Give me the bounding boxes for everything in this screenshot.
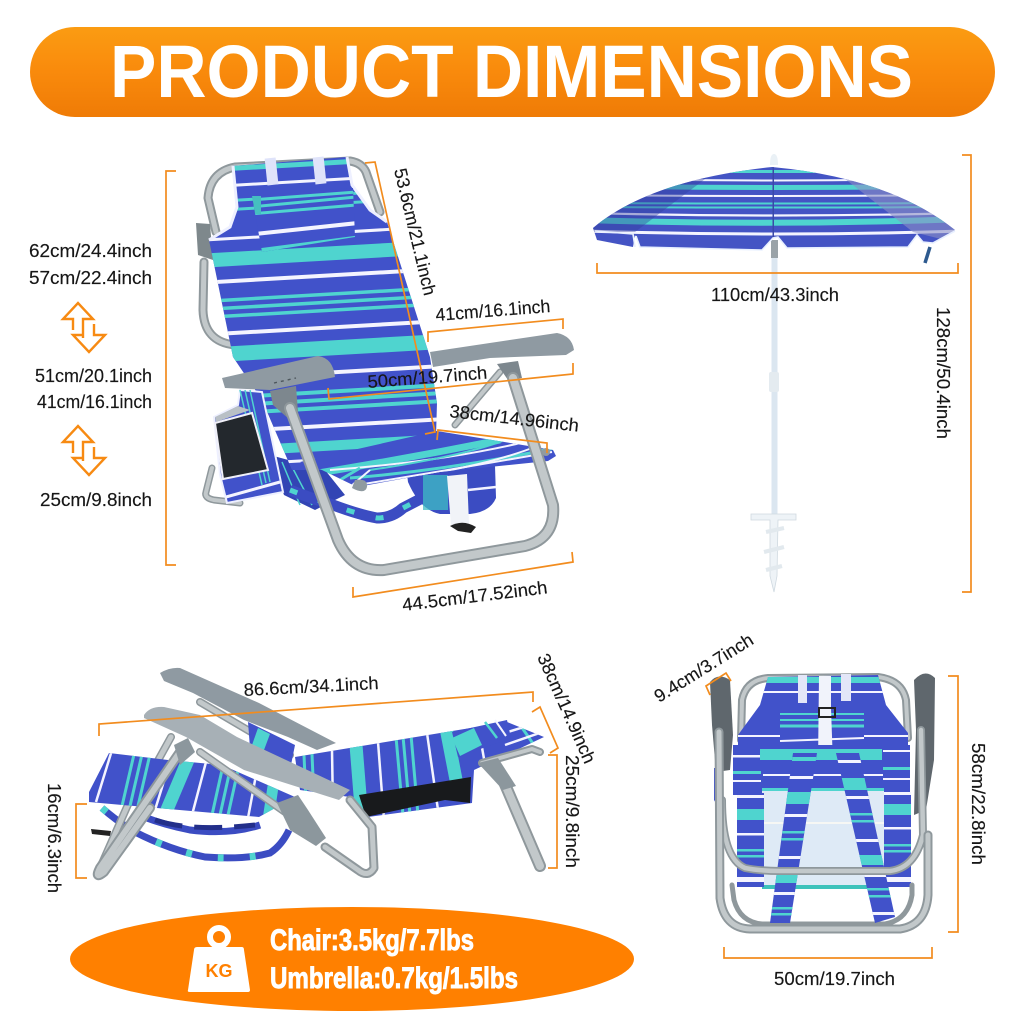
label: armrest length bbox=[428, 296, 563, 342]
label: umbrella height: 128cm/50.4inch bbox=[933, 307, 953, 439]
straps bbox=[91, 808, 289, 858]
weight text: Chair:3.5kg/7.7lbs bbox=[270, 924, 474, 957]
folding frame tubes bbox=[719, 730, 928, 929]
back top tube bbox=[741, 677, 908, 740]
label: chair base width bbox=[353, 552, 573, 615]
height options labels: 41cm/16.1inch bbox=[37, 392, 152, 412]
label: front seat height bbox=[44, 783, 87, 893]
main chair photo bbox=[172, 150, 574, 570]
height options labels: 25cm/9.8inch bbox=[40, 490, 152, 510]
back fabric bbox=[209, 157, 437, 470]
label: chair inner width bbox=[328, 363, 573, 399]
fold fabric peek bbox=[248, 722, 295, 770]
weight callout bbox=[70, 907, 634, 1011]
label: front seat height: 16cm/6.3inch bbox=[44, 783, 64, 893]
label: folded width bbox=[724, 947, 932, 989]
label: headrest length: 38cm/14.9inch bbox=[533, 650, 600, 766]
under-seat straps bbox=[270, 455, 496, 533]
canopy hem bbox=[595, 231, 955, 250]
headrest piping and straps bbox=[209, 156, 387, 240]
reclined chair photo bbox=[85, 668, 550, 875]
inner lower tube bbox=[732, 885, 912, 924]
side fabric left bbox=[737, 793, 764, 887]
label: umbrella width bbox=[597, 263, 958, 305]
label: chair base width: 44.5cm/17.52inch bbox=[401, 577, 548, 615]
weight text: Umbrella:0.7kg/1.5lbs bbox=[270, 962, 518, 995]
label: back height: 53.6cm/21.1inch bbox=[390, 166, 440, 297]
weight text bbox=[270, 924, 518, 995]
title banner: PRODUCT DIMENSIONS bbox=[110, 30, 913, 113]
label: reclined length: 86.6cm/34.1inch bbox=[243, 673, 379, 700]
height bracket left bbox=[166, 171, 176, 565]
canopy bbox=[593, 167, 955, 250]
label: back leg height: 25cm/9.8inch bbox=[562, 755, 582, 868]
label: back height bbox=[365, 162, 440, 434]
label: back leg height bbox=[548, 755, 582, 868]
label: reclined length bbox=[99, 673, 533, 736]
label: chair inner width: 50cm/19.7inch bbox=[367, 363, 488, 392]
foot fabric bbox=[89, 753, 294, 817]
hinge plates bbox=[174, 738, 516, 846]
armrest right bbox=[430, 333, 574, 380]
height options labels bbox=[29, 241, 152, 510]
armrests bbox=[710, 673, 935, 815]
rear legs bbox=[206, 372, 500, 503]
label: seat depth: 38cm/14.96inch bbox=[449, 401, 580, 436]
armrest left bbox=[222, 356, 335, 420]
side pocket bbox=[214, 390, 283, 503]
label: folded width: 50cm/19.7inch bbox=[774, 969, 895, 989]
height options labels: 62cm/24.4inch bbox=[29, 241, 152, 261]
label: umbrella width: 110cm/43.3inch bbox=[711, 285, 839, 305]
pillow bbox=[780, 674, 864, 765]
headrest fabric bbox=[738, 675, 908, 745]
body fabric bbox=[733, 745, 910, 795]
tassel bbox=[925, 247, 930, 263]
back straps bbox=[770, 753, 895, 923]
height options labels: 51cm/20.1inch bbox=[35, 366, 152, 386]
pillow bbox=[452, 720, 511, 757]
far legs and struts bbox=[100, 702, 290, 868]
back frame tube bbox=[196, 161, 380, 345]
seat fabric bbox=[300, 431, 556, 492]
icon: kg weight: KG bbox=[206, 961, 232, 981]
label: umbrella height bbox=[933, 155, 971, 592]
anchor bbox=[751, 514, 796, 592]
pillow bbox=[252, 188, 355, 252]
translucent panel bbox=[762, 788, 884, 889]
frame near bbox=[98, 749, 540, 875]
icon: adjust arrows upper bbox=[63, 303, 105, 352]
label: arm width: 9.4cm/3.7inch bbox=[651, 630, 757, 706]
pole bbox=[769, 154, 779, 520]
label: seat depth bbox=[437, 401, 580, 453]
armrest lower bbox=[144, 707, 350, 800]
label: folded height: 58cm/22.8inch bbox=[968, 743, 988, 865]
back view chair photo bbox=[710, 670, 935, 929]
height options labels: 57cm/22.4inch bbox=[29, 268, 152, 288]
umbrella photo bbox=[585, 154, 965, 592]
front frame tube bbox=[290, 378, 553, 570]
label: folded height bbox=[948, 676, 988, 932]
armrest upper bbox=[160, 668, 336, 750]
back fabric bbox=[295, 722, 544, 817]
icon: adjust arrows lower bbox=[63, 426, 105, 475]
label: armrest length: 41cm/16.1inch bbox=[435, 296, 551, 325]
icon: kg weight bbox=[188, 928, 250, 992]
black band bbox=[359, 777, 471, 817]
side fabric right bbox=[714, 768, 911, 887]
